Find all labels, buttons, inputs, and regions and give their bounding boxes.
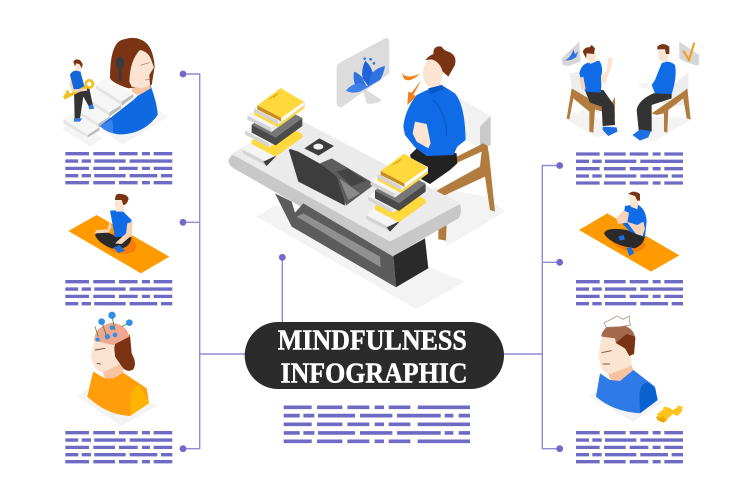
connector lines [183,74,560,449]
title text: INFOGRAPHIC [280,358,468,389]
title pill [245,322,504,389]
text placeholder: left one [65,154,172,183]
speech screen with lotus [337,38,389,107]
illustration: woman meditating on mat [68,194,169,273]
illustration: woman with flowering brain [77,312,158,426]
title text: MINDFULNESS [278,325,467,356]
person [402,46,466,184]
puzzle piece [656,405,683,423]
text placeholder: right one [576,154,683,183]
main illustration: woman at desk breathing [228,38,505,309]
laptop [288,148,375,206]
book stacks [243,88,305,166]
text placeholder: right two [576,282,683,304]
text placeholder: centre [284,407,470,441]
title text [278,325,468,389]
illustration: two people talking on chairs [562,42,699,142]
illustration: man with puzzle head [588,316,683,423]
illustration: man meditating on mat [579,192,679,272]
text placeholder: right three [576,433,683,462]
connector dots [180,71,563,452]
text placeholder: left two [65,282,172,304]
illustration: woman with keyhole head and stairs [62,38,168,147]
text placeholder: left three [65,433,172,462]
